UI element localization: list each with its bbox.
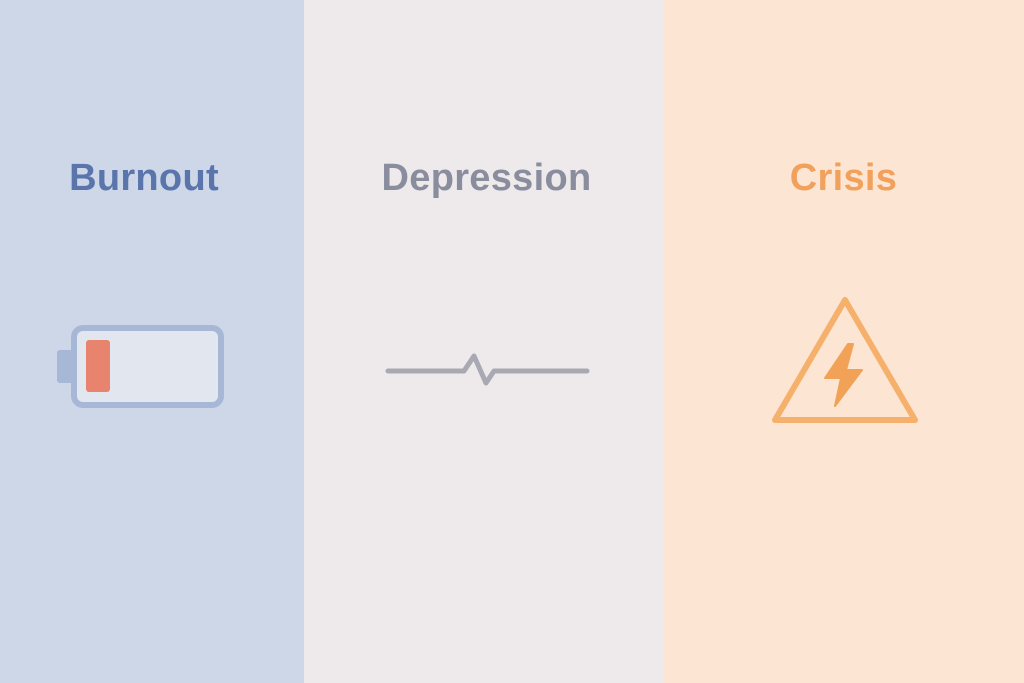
icon: warning triangle (772, 297, 918, 423)
heading: Burnout: Burnout (69, 157, 219, 199)
panel: burnout (0, 0, 304, 683)
panel: depression (304, 0, 663, 683)
panel: crisis (663, 0, 1024, 683)
heading: Depression: Depression (382, 157, 591, 199)
heading: Crisis: Crisis (790, 157, 897, 199)
icon: low battery (57, 325, 224, 408)
icon: flat line (386, 354, 590, 386)
